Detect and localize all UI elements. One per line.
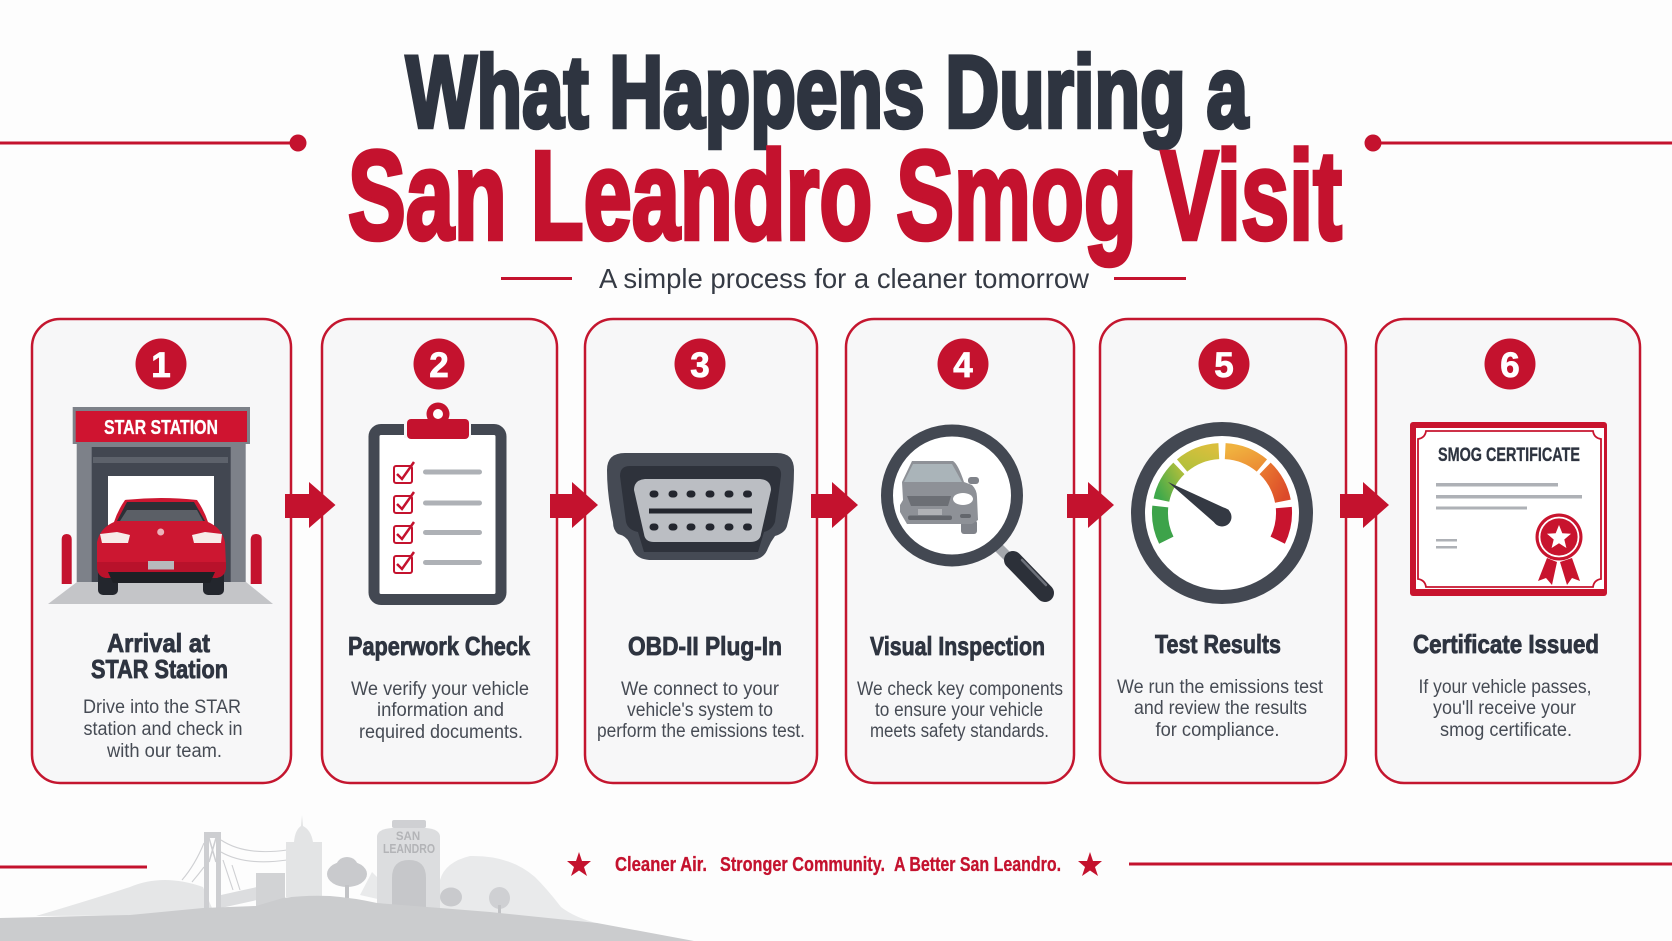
- step 1 heading: STAR Station: [91, 654, 228, 684]
- step 2 description: required documents.: [359, 722, 523, 743]
- step 1 description: with our team.: [106, 741, 222, 762]
- title rule left: [0, 134, 306, 152]
- step 3 description: [597, 679, 805, 742]
- arrow 5 to 6: [1340, 482, 1389, 528]
- step 6 description: you'll receive your: [1433, 698, 1577, 719]
- step 6 description: If your vehicle passes,: [1418, 677, 1592, 698]
- badge 4: [938, 338, 988, 390]
- title rule right: [1364, 134, 1672, 152]
- step 4 description: We check key components: [857, 679, 1063, 700]
- icon: star station with red car: [48, 407, 273, 604]
- title: What Happens During a: [406, 35, 1249, 149]
- footer tagline: A Better San Leandro.: [894, 854, 1061, 876]
- icon: smog certificate: [1410, 422, 1607, 596]
- step 1 description: station and check in: [84, 719, 242, 740]
- panel: step 5 test results: [1100, 319, 1346, 783]
- step 1 heading: Arrival at: [107, 628, 210, 658]
- badge 3: [674, 338, 726, 390]
- icon: OBD-II connector: [607, 453, 794, 560]
- step 4 heading: Visual Inspection: [870, 631, 1045, 661]
- step 5 description: [1117, 677, 1324, 741]
- step 6 description: smog certificate.: [1440, 720, 1572, 741]
- badge 2: [414, 338, 464, 390]
- arrow 1 to 2: [285, 482, 336, 528]
- footer tagline: Stronger Community.: [720, 854, 885, 876]
- step 5 description: for compliance.: [1156, 720, 1280, 741]
- step 3 description: vehicle's system to: [627, 700, 773, 721]
- step 4 description: to ensure your vehicle: [875, 700, 1043, 721]
- icon: clipboard checklist: [374, 402, 501, 600]
- badge 5: [1198, 338, 1250, 390]
- step 1 heading: [91, 628, 228, 684]
- badge 1: [136, 338, 186, 390]
- icon: emissions gauge: [1138, 429, 1306, 597]
- badge 3: 3: [690, 346, 710, 385]
- badge 5: 5: [1214, 346, 1234, 385]
- arrow 3 to 4: [811, 482, 858, 528]
- step 2 description: We verify your vehicle: [351, 679, 529, 700]
- step 6 description: [1418, 677, 1592, 741]
- badge 2: 2: [429, 346, 449, 385]
- icon: star station with red car: STAR STATION: [104, 417, 218, 439]
- step 1 description: Drive into the STAR: [83, 697, 241, 718]
- badge 1: 1: [151, 346, 171, 385]
- skyline of San Leandro: LEANDRO: [383, 842, 435, 856]
- footer rule right: [1129, 862, 1672, 866]
- step 6 heading: Certificate Issued: [1413, 629, 1599, 659]
- step 2 description: information and: [377, 700, 504, 721]
- step 3 description: perform the emissions test.: [597, 721, 805, 742]
- subtitle: A simple process for a cleaner tomorrow: [599, 263, 1090, 294]
- badge 4: 4: [953, 346, 973, 385]
- panel: step 1 arrival: [32, 319, 291, 783]
- skyline of San Leandro: [0, 815, 694, 941]
- footer tagline: Cleaner Air.: [615, 854, 707, 876]
- step 5 description: We run the emissions test: [1117, 677, 1324, 698]
- step 2 heading: Paperwork Check: [348, 631, 530, 661]
- badge 6: 6: [1500, 346, 1520, 385]
- footer tagline: [567, 852, 1102, 876]
- panel: step 4 visual inspection: [846, 319, 1074, 783]
- step 5 heading: Test Results: [1155, 629, 1281, 659]
- step 3 heading: OBD-II Plug-In: [628, 631, 782, 661]
- badge 6: [1484, 338, 1536, 390]
- step 4 description: meets safety standards.: [870, 721, 1049, 742]
- title: [348, 35, 1342, 266]
- skyline of San Leandro: SAN: [396, 831, 420, 843]
- icon: smog certificate: SMOG CERTIFICATE: [1438, 444, 1580, 466]
- step 1 description: [83, 697, 242, 762]
- step 3 description: We connect to your: [621, 679, 780, 700]
- step 2 description: [351, 679, 529, 743]
- step 4 description: [857, 679, 1063, 742]
- step 5 description: and review the results: [1134, 698, 1307, 719]
- panel: step 2 paperwork: [322, 319, 557, 783]
- panel: step 3 OBD: [585, 319, 817, 783]
- panel: step 6 certificate: [1376, 319, 1640, 783]
- arrow 4 to 5: [1067, 482, 1114, 528]
- arrow 2 to 3: [550, 482, 598, 528]
- footer rule left: [0, 866, 147, 868]
- icon: magnifier over car: [887, 430, 1046, 593]
